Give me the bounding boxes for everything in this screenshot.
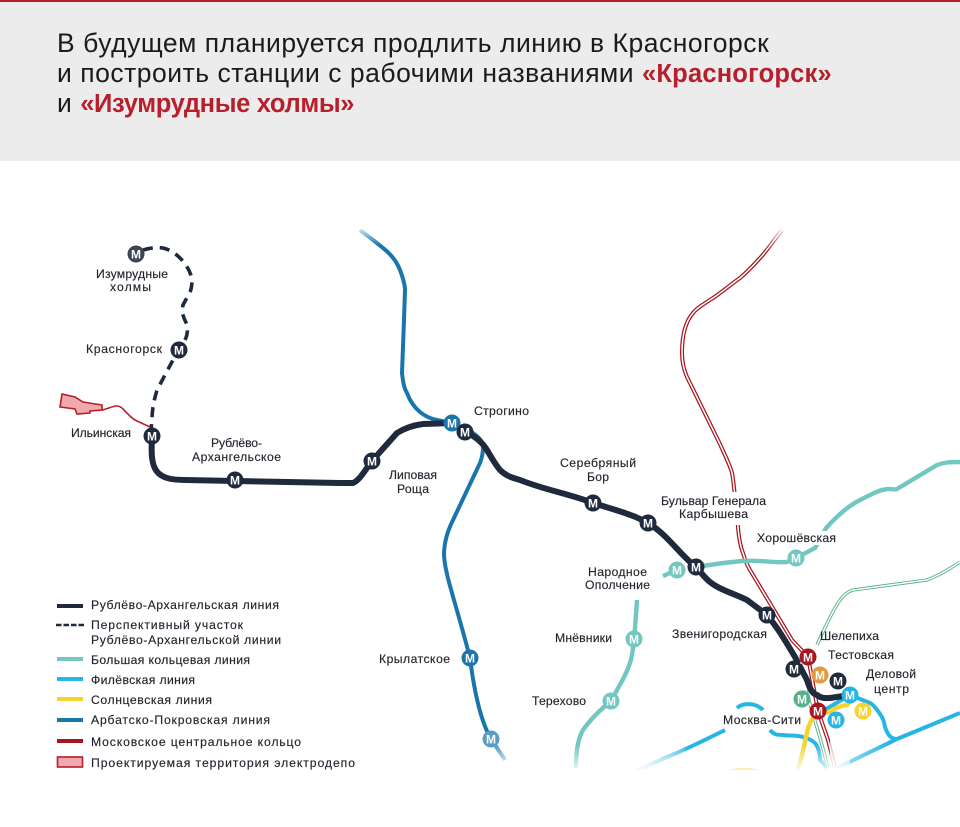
station: Деловой центр dark bbox=[830, 672, 846, 690]
Bolshaya Koltsevaya line bbox=[576, 462, 960, 768]
station: unnamed blue bbox=[482, 730, 500, 748]
label: Рублёво-Архангельское bbox=[192, 436, 281, 464]
label: Изумрудные холмы: Изумрудные bbox=[96, 267, 168, 281]
station: Москва-Сити blue bbox=[828, 712, 844, 728]
station: Звенигородская dark interchange: М bbox=[789, 662, 799, 676]
label: Крылатское: Крылатское bbox=[379, 652, 450, 666]
label: Хорошёвская: Хорошёвская bbox=[757, 531, 836, 545]
label: Липовая Роща: Липовая bbox=[389, 468, 437, 482]
legend: Перспективный участок: Рублёво-Архангельской линии bbox=[91, 633, 281, 647]
label: Шелепиха: Шелепиха bbox=[820, 629, 879, 643]
station: Изумрудные холмы bbox=[128, 246, 144, 262]
station: Терехово bbox=[602, 692, 620, 710]
top rule bbox=[0, 0, 960, 2]
station: Рублёво-Архангельское bbox=[226, 472, 244, 488]
Arbatsko-Pokrovskaya line bbox=[360, 230, 505, 760]
station: Мнёвники bbox=[626, 630, 642, 648]
station: Деловой центр yellow: М bbox=[858, 704, 868, 718]
station: Деловой центр blue bbox=[842, 686, 858, 704]
station: green: М bbox=[797, 692, 807, 706]
station: Ильинская: М bbox=[147, 430, 157, 444]
label: Красногорск: Красногорск bbox=[86, 342, 163, 356]
label: Деловой центр: центр bbox=[874, 682, 909, 696]
station: Строгино dark bbox=[456, 424, 474, 440]
station: Липовая Роща: М bbox=[367, 454, 377, 468]
label: Москва-Сити: Москва-Сити bbox=[723, 713, 801, 727]
station: Ильинская bbox=[144, 428, 160, 444]
Rublyovo-Arkhangelskaya line bbox=[152, 423, 850, 698]
station: Изумрудные холмы: М bbox=[131, 248, 141, 262]
label: Деловой центр bbox=[866, 667, 916, 696]
legend: Перспективный участок: Перспективный участок bbox=[91, 618, 244, 632]
label: Терехово: Терехово bbox=[532, 694, 586, 708]
station: Серебряный Бор: М bbox=[588, 496, 598, 510]
station: Москва-Сити red bbox=[810, 702, 826, 720]
legend: Проектируемая территория электродепо: Проектируемая территория электродепо bbox=[91, 756, 355, 770]
station: Крылатское: М bbox=[465, 652, 475, 666]
label: Народное Ополчение bbox=[585, 565, 650, 592]
legend: Московское центральное кольцо: Московское центральное кольцо bbox=[91, 735, 301, 749]
station labels bbox=[71, 267, 916, 727]
label: Серебряный Бор: Серебряный bbox=[560, 456, 636, 470]
station: Красногорск: М bbox=[174, 344, 184, 358]
label: Серебряный Бор: Бор bbox=[587, 470, 609, 484]
station: Терехово: М bbox=[606, 694, 616, 708]
title: и построить станции с рабочими названиями «Красногорск» bbox=[57, 58, 832, 88]
label: Ильинская: Ильинская bbox=[71, 426, 131, 440]
label: Народное Ополчение: Народное bbox=[588, 565, 647, 579]
legend bbox=[56, 598, 355, 770]
station: Народное Ополчение dark: М bbox=[691, 560, 701, 574]
depot link line bbox=[102, 406, 150, 427]
station: Шелепиха bbox=[800, 648, 816, 666]
station: green bbox=[794, 690, 810, 708]
legend: Арбатско-Покровская линия: Арбатско-Покровская линия bbox=[91, 713, 270, 727]
station: Москва-Сити blue: М bbox=[831, 714, 841, 728]
station: Хорошёвская: М bbox=[791, 552, 801, 566]
station: Москва-Сити red: М bbox=[813, 704, 823, 718]
station: Тестовская bbox=[812, 666, 828, 684]
station: Звенигородская dark interchange bbox=[786, 660, 802, 678]
label: Серебряный Бор bbox=[560, 456, 636, 484]
label: Тестовская: Тестовская bbox=[828, 648, 894, 662]
transfer links bbox=[794, 657, 863, 720]
station: Крылатское bbox=[462, 650, 478, 666]
label: Мнёвники: Мнёвники bbox=[555, 631, 612, 645]
label: Народное Ополчение: Ополчение bbox=[585, 578, 650, 592]
Moscow Central Circle line bbox=[682, 230, 835, 768]
label: Бульвар Генерала Карбышева: Бульвар Генерала bbox=[661, 494, 766, 508]
station: Строгино blue bbox=[444, 414, 460, 432]
label: Звенигородская: Звенигородская bbox=[672, 627, 767, 641]
legend: Солнцевская линия: Солнцевская линия bbox=[91, 693, 212, 707]
station: unnamed blue: М bbox=[486, 732, 496, 746]
stations bbox=[128, 246, 872, 748]
station: Народное Ополчение teal: М bbox=[672, 564, 682, 578]
Solntsevskaya line bbox=[725, 702, 850, 773]
label: Изумрудные холмы bbox=[96, 267, 168, 294]
station: Красногорск bbox=[170, 342, 188, 358]
station: Звенигородская: М bbox=[762, 608, 772, 622]
legend: Большая кольцевая линия: Большая кольцевая линия bbox=[91, 653, 250, 667]
station: Мнёвники: М bbox=[629, 632, 639, 646]
MCD green line bbox=[806, 562, 960, 768]
depot territory bbox=[60, 394, 102, 414]
label: Деловой центр: Деловой bbox=[866, 667, 916, 681]
station: Деловой центр blue: М bbox=[845, 688, 855, 702]
station: Деловой центр dark: М bbox=[833, 674, 843, 688]
station: Деловой центр yellow bbox=[854, 702, 872, 720]
title: В будущем планируется продлить линию в Красногорск bbox=[57, 28, 769, 58]
label: Изумрудные холмы: холмы bbox=[110, 280, 151, 294]
label: Бульвар Генерала Карбышева bbox=[661, 494, 766, 521]
station: Рублёво-Архангельское: М bbox=[230, 474, 240, 488]
title: и «Изумрудные холмы» bbox=[57, 88, 354, 118]
legend: Перспективный участок bbox=[56, 618, 281, 647]
station: Строгино blue: М bbox=[447, 416, 457, 430]
label: Липовая Роща bbox=[389, 468, 437, 496]
label: Липовая Роща: Роща bbox=[397, 482, 429, 496]
header band bbox=[0, 0, 960, 161]
station: Бульвар Генерала Карбышева bbox=[640, 514, 656, 532]
label: Рублёво-Архангельское: Рублёво- bbox=[211, 436, 262, 450]
label: Бульвар Генерала Карбышева: Карбышева bbox=[679, 507, 748, 521]
label: Строгино: Строгино bbox=[474, 404, 529, 418]
perspective section bbox=[143, 248, 192, 430]
legend: Филёвская линия: Филёвская линия bbox=[91, 673, 195, 687]
station: Бульвар Генерала Карбышева: М bbox=[643, 516, 653, 530]
station: Народное Ополчение teal bbox=[668, 562, 686, 578]
title bbox=[57, 28, 832, 118]
station: Шелепиха: М bbox=[803, 650, 813, 664]
label gaps and fade-outs bbox=[350, 225, 960, 782]
station: Тестовская: М bbox=[815, 668, 825, 682]
station: Серебряный Бор bbox=[584, 494, 602, 512]
station: Строгино dark: М bbox=[460, 426, 470, 440]
station: Липовая Роща bbox=[364, 452, 380, 470]
station: Народное Ополчение dark bbox=[688, 558, 704, 576]
Filyovskaya line bbox=[630, 695, 960, 773]
label: Рублёво-Архангельское: Архангельское bbox=[192, 450, 281, 464]
station: Звенигородская bbox=[758, 606, 776, 624]
station: Хорошёвская bbox=[788, 550, 804, 566]
legend: Рублёво-Архангельская линия: Рублёво-Архангельская линия bbox=[91, 598, 279, 612]
